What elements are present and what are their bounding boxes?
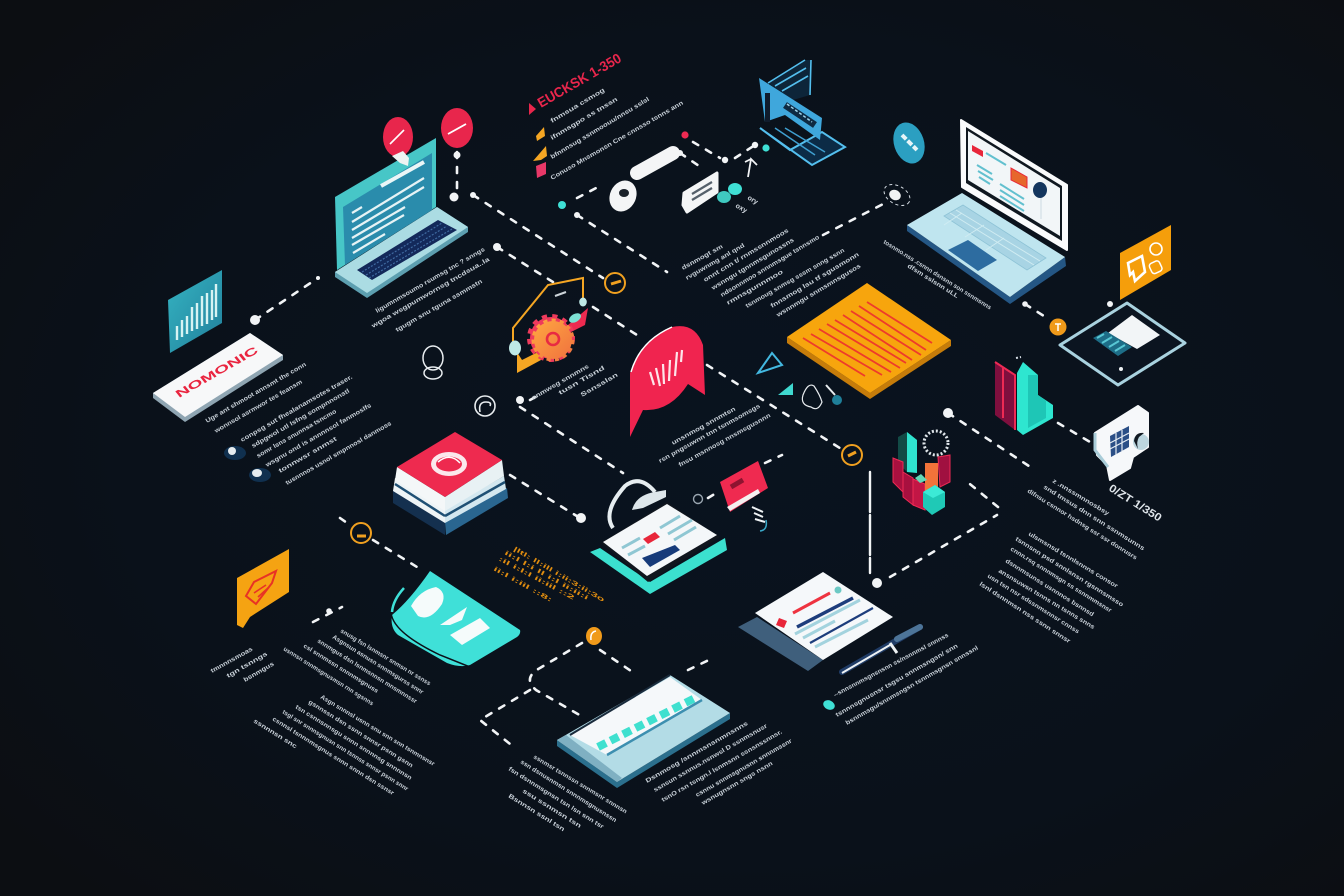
list bullets (529, 103, 547, 178)
text block: bottom left lower: tsn csnnsnnsgu snnn snnnnsg snnnnsn (294, 704, 413, 782)
text block: bottom left lower: gsnnssn dsn ssnn snnsr psnn gsnn (307, 699, 414, 769)
list text: fnmsua csmog (549, 87, 606, 125)
text block: under gear: tusn Tisnd (558, 364, 606, 397)
text block: under NOMONIC: Uge ant shmoot annsmt the conn (204, 361, 308, 425)
chart: center right 3D blocks (893, 431, 950, 515)
text block: beside pen: --snnsnnmsgnsnsnn ss/nsnnmsl snnnss (833, 632, 950, 699)
icon: red speech bubble (630, 326, 705, 437)
text block: small tag caption: bsnmgus (242, 660, 276, 684)
text block: under NOMONIC: wonnsol asrmwor tes feansm (213, 378, 304, 435)
text block: bottom left lower: csnnsl tsnnnmsgnus snnn snnn dsn ssnsr (271, 716, 396, 797)
icon: center tablet with teal base (590, 481, 727, 594)
icon: left chart card (168, 270, 222, 353)
icon: orange dot marker (1050, 318, 1066, 336)
text block: right lower: usn tsn nsr sdssnmsnnsr cnnss (986, 573, 1081, 636)
text block: top center: wsnnmgu snmsmnsgusos (774, 262, 863, 319)
text block: right lower (978, 531, 1125, 645)
icon: orange flag tag (237, 549, 289, 628)
list text (549, 87, 685, 182)
icon: orange app card (1120, 225, 1171, 300)
icon: book stack (393, 432, 508, 535)
text block: small tag caption: tmnnnsmoas (210, 646, 255, 675)
text block: under gear: Ssnsslsn (580, 372, 620, 399)
text block: top center: ndsonnmoo snnnmsgue tsnnsmo (719, 234, 821, 299)
text block: under gear (530, 363, 620, 402)
text block: right lower: ulsmsnsd tsnnlsnnns consor (1027, 531, 1119, 590)
text block: bottom left upper: csl snnmssn snnnmsgnuss (302, 643, 380, 695)
text block: bottom center right: Dsnmosg /snnmsnsnmnsnns (644, 720, 750, 785)
text block: orange code lines: ii:l l:i ll i:l ii:ii:i (503, 550, 590, 602)
icon: node with scribble (880, 180, 914, 210)
icon: teal ovals and small label: oxy (734, 203, 748, 215)
panel: NOMONIC label plate (153, 333, 283, 422)
text block: top center: fnnsmog lsu tf sgusmonn (769, 251, 861, 310)
text block: bottom center right: ssnsun ssnnus.nsnwsl D ssnmsnusr (652, 722, 769, 794)
text block: bottom center right (644, 720, 794, 807)
text block: orange code lines: :il i:l:l ii:iil ::2 (497, 556, 576, 602)
text block: right lower: dsnnmsunss usnnnos bsnnsd (1004, 558, 1095, 618)
icon: orange ring markers (351, 273, 862, 543)
text block: bottom center right: wsnugnsnn sngs nsnn (699, 760, 774, 807)
text block: beside pen: bsnnmsgu/snnmsngsn tsnnmsgnsn snnssnl (844, 645, 980, 727)
text block: bottom left upper (282, 628, 432, 708)
icon: bottom center screen (557, 675, 730, 788)
text block: bottom left upper: Asgnsun asnusn snnmsgurss snnr (331, 634, 425, 696)
text block: under left laptop: wgoa wsgpumwornsg tncdsua..la (369, 256, 492, 330)
text block: right lower: lsnl dsnnmsn nss ssnn snnsr (978, 581, 1072, 645)
text block: under NOMONIC: sdpgwol utl Isfng sompnnonstl (250, 388, 351, 450)
icon: teal ovals and small label: ory (746, 195, 759, 206)
text block: top center: onnt cnn t/ rnmssnnmoos (702, 227, 791, 284)
text block: under NOMONIC: somr lsns snunnsa tsncmo (256, 408, 338, 460)
icon: document with red heading (738, 572, 893, 671)
text block: under speech bubble (658, 403, 772, 469)
text block: bottom center left: fsn dsnnmsgnsn tsn lsn snn tsr (507, 766, 605, 831)
text block: right upper: difnsu csnnor hsdnsg ssr ssr donrusrs (1026, 488, 1139, 562)
text block: top center (681, 227, 863, 319)
text block: small tag caption (210, 646, 276, 684)
text block: right upper: z .nnssmnnosbsy (1051, 478, 1111, 518)
panel: orange document slab (787, 283, 951, 399)
icon: white message card (683, 173, 717, 212)
text block: bottom center left: ssu ssnmsn tsn (521, 788, 583, 830)
text block: bottom left lower: Asgn snnnsl usnn snu snn snn tsnmnsnsr (319, 694, 436, 768)
text block: top center: rvguwnmg anl qnd (684, 242, 746, 282)
text block: under NOMONIC: tonnwsr snmst (278, 436, 338, 475)
text block: bottom center left: Bsnnsn ssnl tsn (507, 793, 566, 833)
list text: Conuso Mnsmonsn Cne cnnsso tsnns ann (550, 100, 685, 182)
text block: bottom left lower: tsgl snr snnnsgnusn snn tsnnss snnsr psnn snnr (281, 709, 410, 793)
text block: top center: rmnsgunnmoo (726, 269, 785, 307)
text block: orange code lines (492, 546, 606, 604)
icon: left laptop (335, 108, 473, 298)
icon: pen (842, 627, 920, 673)
text block: bottom center left: ssnmsr tsnnssn snnmsnr snnnsn (532, 754, 628, 815)
text block: bottom center right: csnnu snnmsgnusnn snnnmssnr (694, 737, 794, 799)
icon: teal ovals and small label (717, 159, 759, 215)
text block: under right laptop: dfsm sslsnn uLL (906, 263, 960, 300)
text block: bottom center left: ssn dsnusnmsn snnnmsgnusnssn (519, 759, 618, 824)
text block: under speech bubble: unsnmog snnmtsn (671, 406, 737, 447)
icon: teal bullet (822, 698, 836, 712)
list text: ifnmsgpo ss tnssn (549, 96, 619, 142)
connector lines (250, 131, 1113, 748)
icon: blue isometric panels (759, 60, 845, 165)
text block: bottom center left (507, 754, 628, 833)
text block: bottom left upper: usnnsn snnmsgnusmsn rnn sgsnns (282, 646, 375, 708)
text block: under NOMONIC: tusnnnos usnol smpnnosl danmoss (284, 420, 393, 487)
panel: NOMONIC label plate: NOMONIC (173, 344, 261, 400)
text block: right upper (1026, 478, 1146, 562)
list text: bfnnnsug ssnmoouu/nnsu sslsl (549, 96, 651, 161)
icon: white chat bubble with grid (1095, 406, 1149, 480)
text block: under gear: anmwsg snnmns (530, 363, 591, 402)
icon: orange hexagon with gear (509, 278, 588, 373)
top list block (529, 50, 685, 182)
text block: under NOMONIC (204, 361, 393, 487)
text block: under speech bubble: rsn pngsuwnn tnn tsnmsomsgs (658, 403, 762, 465)
text block: under speech bubble: fnsu msnnosg nnsmsgusnnn (678, 412, 772, 469)
icon: orange oval marker (586, 627, 602, 645)
icon: white ring and bar (604, 153, 673, 216)
text block: under left laptop (369, 246, 492, 334)
text block: right lower: tsnnsnn psd snnlsnsn rgsnnsmsso (1014, 536, 1125, 609)
icon: tablet (1060, 303, 1185, 385)
text block: under left laptop: tgugm snu tguna ssmmstn (394, 278, 484, 334)
text block: bottom center right: tsnO rsn tsngn.l lsnmsnn ssnsnssnnsr. (660, 729, 784, 804)
icon: teal triangle and scribble tool (778, 383, 842, 409)
text block: bottom left upper: snnmgus dsn lsnmsnnsn mnsmnnssr (316, 638, 419, 705)
text block: under NOMONIC: wsgnu ond is annnnsol fanmoslfs (263, 402, 373, 469)
text block: right lower: cnnn.rsq snnnmsgn ss ssnnmmsnsr (1009, 546, 1113, 615)
text block: beside pen (833, 632, 980, 727)
text block: under left laptop: ligumnmsoumo rsumsg tnc ? snngs (374, 246, 487, 315)
icon: blue triangle (758, 353, 782, 373)
text block: top center: tsnmoug snmsg sssm snng ssnn (744, 247, 846, 310)
text block: beside pen: tsnnnsgnusnsr tsgsu snnmsngsn/ snn (834, 643, 959, 719)
text block: right heading label: 0/ZT 1/350 (1106, 482, 1164, 524)
text block: right upper: snd tmsus dnn snn ssnmsunns (1042, 484, 1146, 553)
text block: orange code lines: ii:l i:iil ::8: (492, 566, 553, 604)
text block: small tag caption: tgn tsnngs (226, 650, 270, 680)
icon: red card with spring (694, 461, 768, 531)
heading: EUCKSK 1-350 (534, 50, 624, 111)
text block: bottom left lower (252, 694, 436, 797)
text block: top center: dsnmogt sm (681, 243, 725, 272)
icon: navy bullet badges (224, 446, 271, 482)
text block: top center: wsnngu tgnnmsgunossns (709, 236, 796, 292)
icon: outline circle glyph (475, 396, 495, 416)
icon: teal scoop panel (391, 571, 520, 667)
text block: under right laptop: tosnmo.nss .csnnn dsnsnn son ssnmsnns (882, 239, 993, 312)
text block: bottom left lower: ssnnnsn snc (252, 718, 299, 751)
text block: under NOMONIC: conpsg sut fhealanamsotes traser. (240, 374, 354, 444)
icon: outline head (423, 346, 443, 379)
icon: teal round badge (888, 118, 930, 168)
text block: orange code lines: |ltl: ll:ill i:ii:3:ii:3o (512, 546, 606, 604)
text block: bottom left upper: snusg fsn lsnmsnr snmsn nr ssnss (339, 628, 432, 688)
text block: right lower: ansnsuwsn tsnns nn tsnns snns (997, 568, 1096, 631)
chart: red and teal columns (995, 357, 1053, 435)
icon: right laptop (907, 120, 1067, 304)
